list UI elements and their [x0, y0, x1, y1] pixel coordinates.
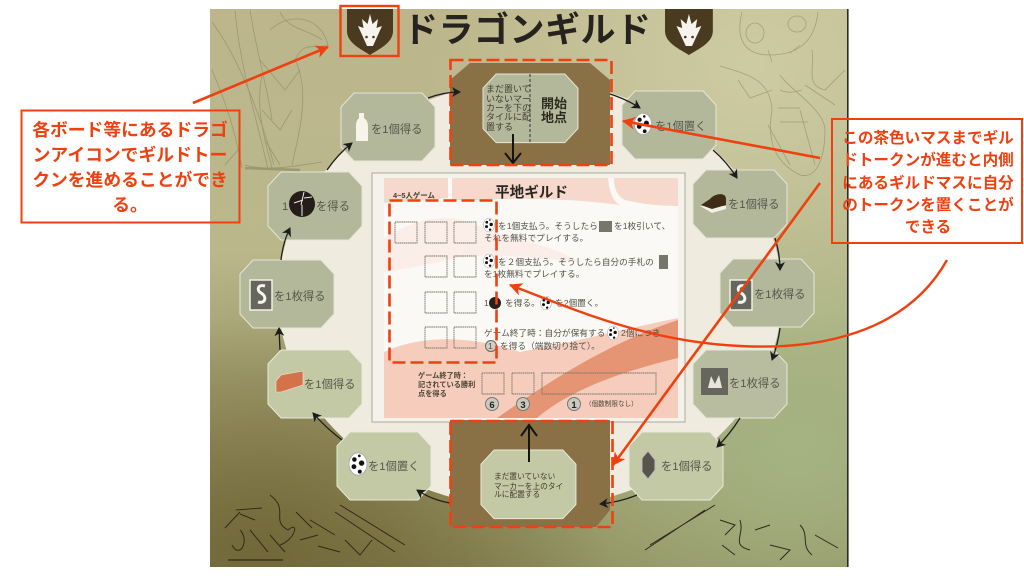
callout arrow to upper brown space — [623, 121, 820, 158]
illustration: large dragon sketch left — [212, 10, 328, 170]
cell: dark resource — [268, 172, 362, 240]
ability row 3: を得る。 — [505, 297, 540, 308]
callout right — [832, 119, 1022, 243]
callout right: のトークンを置くことが — [842, 195, 1014, 214]
heading: 平地ギルド — [495, 184, 568, 201]
scribbles bottom right — [645, 505, 838, 560]
track: pale ring area — [278, 82, 782, 508]
start space: brown top: 置する — [486, 122, 513, 132]
start instructions tile — [483, 74, 578, 143]
icon: dragon guild shield — [347, 9, 393, 55]
illustration: small dragon sketch right — [720, 12, 845, 176]
victory point values: 6 — [489, 400, 495, 411]
end-game scoring label — [418, 371, 475, 398]
scoring slots — [482, 373, 656, 394]
ability row 3 — [484, 296, 603, 310]
callout arrow to lower brown space — [613, 183, 820, 465]
cell: place egg lower left — [337, 432, 431, 500]
ability row 4 — [484, 326, 661, 352]
icon: card — [250, 280, 272, 310]
placement instructions tile — [481, 450, 576, 519]
cell: milk — [341, 93, 435, 161]
lower brown space: マーカーを上のタイ — [494, 482, 563, 491]
cell: place egg lower left: を1個置く — [368, 460, 419, 473]
highlight: shield box — [340, 6, 398, 56]
victory point values — [486, 398, 580, 411]
cell: food: を1個得る — [728, 198, 779, 211]
callout right: できる — [905, 218, 951, 236]
victory point values: 3 — [520, 400, 526, 411]
icon: dragon guild shield right — [665, 9, 713, 55]
highlight: start space dashes — [450, 60, 612, 165]
ability row 2: を1枚無料でプレイする。 — [484, 268, 584, 279]
cell: card left — [240, 260, 334, 328]
end-game scoring label: 記されている勝利 — [418, 380, 475, 389]
callout arrow to shield — [193, 47, 328, 103]
lower brown space: まだ置いていない — [494, 472, 556, 481]
start label: 開始 — [541, 96, 567, 111]
ability row 1: を1個支払う。そうしたら — [498, 220, 598, 231]
cell: card right — [720, 259, 814, 327]
start space: brown top: カーを下の — [486, 103, 531, 113]
lower brown space — [450, 420, 610, 527]
ability row 3: を2個置く。 — [555, 297, 603, 308]
highlight: guild slots dashes — [390, 200, 496, 362]
cell: gem: を1個得る — [661, 460, 712, 473]
lower brown space: ルに配置する — [494, 490, 540, 499]
callout left: 各ボード等にあるドラゴ — [32, 119, 228, 140]
callout right: この茶色いマスまでギル — [842, 128, 1014, 147]
start space: brown top: いないマー — [486, 94, 531, 104]
cell: card left: を1枚得る — [274, 289, 325, 303]
cell: gem — [629, 432, 723, 500]
icon: food — [700, 194, 726, 213]
icon: gem — [642, 451, 655, 479]
cell: card right: を1枚得る — [754, 287, 805, 301]
cell: food — [693, 170, 787, 238]
icon: card — [730, 280, 752, 310]
victory point values: 1 — [571, 400, 577, 411]
callout left: クンを進めることができ — [32, 169, 228, 190]
arrow up — [521, 425, 537, 462]
callout left: ンアイコンでギルドトー — [33, 145, 227, 165]
cell: place egg upper right — [622, 91, 716, 159]
icon: dark resource — [289, 191, 315, 217]
no limit note: （個数制限なし） — [585, 399, 638, 408]
ability row 4: 1 — [488, 341, 493, 351]
cell: dark resource: を得る — [316, 200, 350, 213]
icon: brick — [276, 371, 303, 392]
start space: brown top — [450, 63, 610, 165]
ability row 4: を得る（端数切り捨て）。 — [500, 340, 600, 351]
start space: brown top: まだ置いて — [486, 84, 531, 94]
callout left: る。 — [112, 195, 148, 215]
panel artwork — [384, 178, 678, 418]
center panel: 平地ギルド — [372, 173, 685, 422]
guild marker slots — [395, 222, 476, 348]
ability row 4: ゲーム終了時：自分が保有する — [484, 327, 605, 338]
ability row 3: 1 — [484, 298, 489, 308]
cell: place egg upper right: を1個置く — [655, 120, 706, 133]
callout right: ドトークンが進むと内側 — [842, 150, 1014, 169]
ability row 2: を２個支払う。そうしたら自分の手札の — [498, 256, 654, 267]
track arrows — [279, 92, 780, 504]
cell: brick — [268, 350, 362, 418]
arrow down — [505, 134, 521, 163]
scribbles bottom left — [225, 495, 405, 560]
cell: dark resource: 1 — [282, 201, 288, 213]
callout right: にあるギルドマスに自分 — [842, 174, 1014, 192]
ability row 1: を1枚引いて、 — [614, 220, 670, 231]
callout arrow to guild slots — [510, 260, 947, 347]
board background — [210, 9, 849, 567]
start label — [541, 96, 567, 125]
player count label: 4~5人ゲーム — [393, 191, 435, 200]
cell: crystal card: を1枚得る — [729, 376, 780, 390]
icon: egg — [634, 113, 652, 135]
icon: crystal card — [701, 368, 728, 395]
title: ドラゴンギルド — [403, 10, 652, 50]
highlight: lower space dashes — [450, 421, 612, 527]
ability row 4: 2個につき — [621, 327, 661, 338]
cell: brick: を1個得る — [304, 378, 355, 391]
icon: egg — [349, 453, 367, 475]
cell: milk: を1個得る — [371, 123, 422, 136]
ability row 1 — [484, 218, 670, 243]
start space: brown top: タイルに配 — [486, 112, 531, 122]
start label: 地点 — [541, 110, 567, 125]
ability row 2 — [484, 254, 668, 279]
ability row 1: それを無料でプレイする。 — [484, 232, 588, 243]
callout left — [22, 110, 240, 222]
icon: bottle — [356, 113, 368, 141]
end-game scoring label: 点を得る — [418, 389, 447, 398]
end-game scoring label: ゲーム終了時： — [418, 371, 468, 380]
cell: crystal card — [693, 350, 787, 418]
